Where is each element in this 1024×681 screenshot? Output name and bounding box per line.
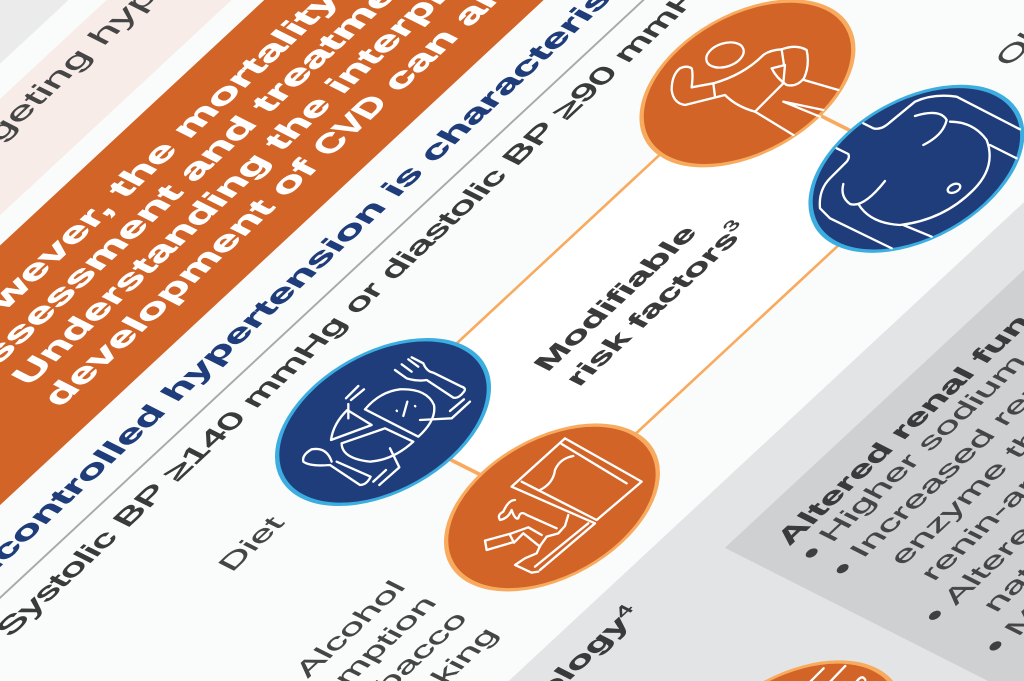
circle: obesity (767, 59, 1024, 278)
text: orange line 4 (34, 0, 526, 411)
icon: plate and cutlery (303, 357, 470, 485)
heading: modifiable risk factors: Modifiable (528, 222, 703, 375)
panel: altered renal function (725, 0, 1024, 681)
text: orange line 4: development of (34, 154, 326, 411)
label: alcohol consumption and tobacco smoking: Alcohol (288, 577, 412, 681)
heading: modifiable risk factors: risk factors (559, 228, 746, 390)
icon: person resting (672, 38, 838, 135)
circle: alcohol and tobacco (403, 398, 701, 617)
circle: physical activity (598, 0, 897, 193)
circle: pathophysiology icon (646, 635, 944, 681)
label: diet: Diet (212, 513, 291, 575)
label: alcohol consumption and tobacco smoking (216, 577, 505, 681)
icon: lower pathophysiology symbol (809, 666, 865, 681)
heading: modifiable risk factors: 3 (719, 217, 745, 235)
icon: cigarette and ashtray (485, 438, 642, 573)
text: orange line 4: CVD (305, 90, 395, 161)
list: renal function bullets (794, 308, 1024, 657)
heading: pathophysiology: 4 (610, 602, 639, 621)
icon: abdomen (820, 96, 1020, 248)
circle: diet (234, 313, 532, 531)
panel: risk factor connector frame (374, 77, 923, 511)
